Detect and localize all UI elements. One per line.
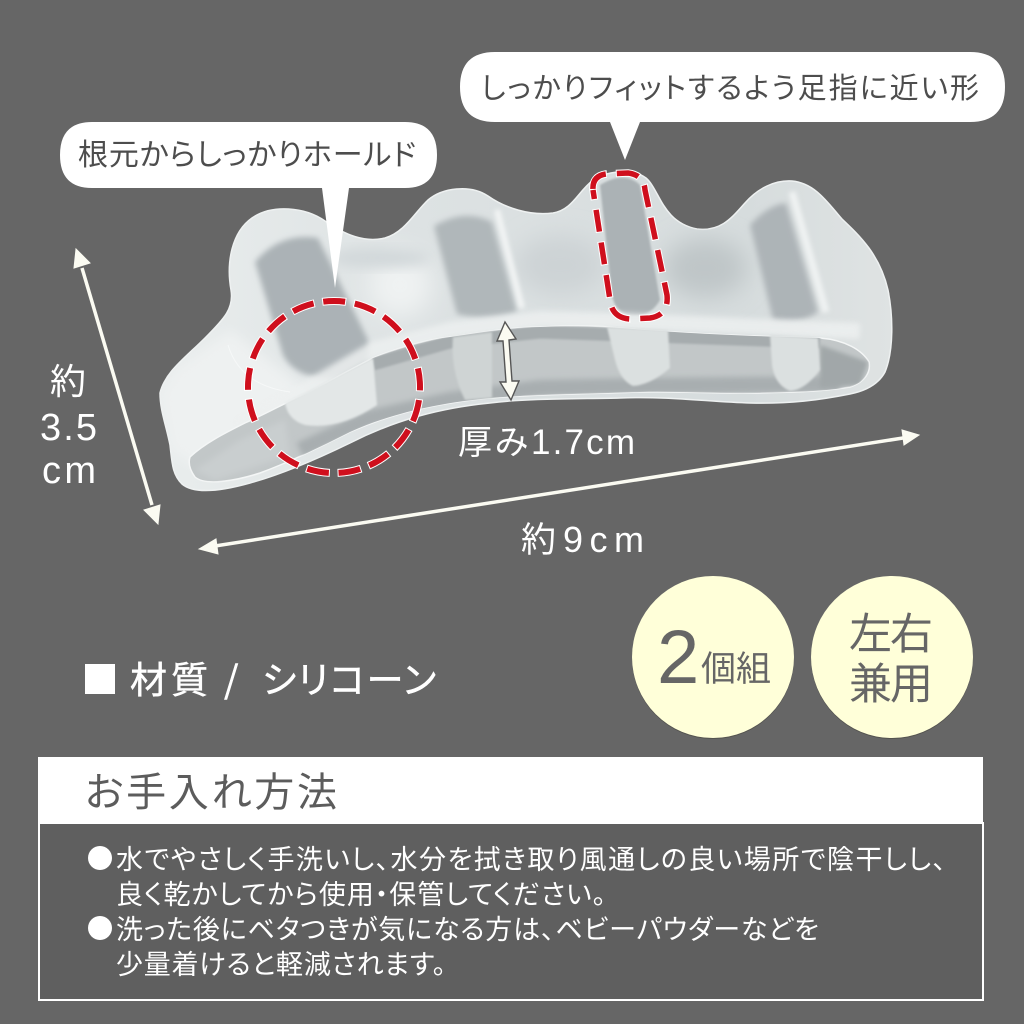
product photo: silicone toe separator <box>160 172 892 490</box>
finger slot 1 <box>255 237 369 378</box>
material label: / <box>224 650 239 704</box>
support tab 4 <box>770 335 820 391</box>
care panel header <box>38 757 983 823</box>
label: height <box>40 353 97 492</box>
callout: root hold: 根元からしっかりホールド <box>78 130 416 174</box>
material label <box>85 650 436 704</box>
care text: 良く乾かしてから使用・保管してください。 <box>116 873 606 912</box>
care text: 洗った後にベタつきが気になる方は、ベビーパウダーなどを <box>116 908 819 947</box>
inner opening of the band <box>189 326 869 482</box>
care text <box>88 838 946 982</box>
label: width: 9cm <box>563 519 644 560</box>
care text: 水でやさしく手洗いし、水分を拭き取り風通しの良い場所で陰干しし、 <box>116 838 946 877</box>
label: height: 約 <box>50 353 86 405</box>
arrow: height <box>74 249 160 524</box>
callout: fit shape: しっかりフィットするよう足指に近い形 <box>481 65 979 107</box>
label: width: 約 <box>521 512 556 563</box>
label: height: cm <box>42 450 96 492</box>
badge: 2 pieces: 個組 <box>701 641 771 692</box>
badge: left-right: 左右 <box>849 600 933 662</box>
finger slot 4 <box>750 203 818 321</box>
label: width <box>521 512 644 563</box>
label: height: 3.5 <box>40 407 97 449</box>
badge: 2 pieces: 2 <box>657 615 699 700</box>
material label: 材質 <box>130 650 208 704</box>
support tab 2 <box>452 332 492 400</box>
badge: left-right <box>811 576 973 739</box>
arrow: width <box>199 430 919 554</box>
dashed highlight: finger root circle <box>248 301 420 473</box>
finger slot 3 <box>600 178 660 315</box>
material label: シリコーン <box>262 650 436 704</box>
support tab 1 <box>285 358 377 426</box>
support tab 3 <box>607 327 670 386</box>
panel: care instructions <box>38 757 983 1000</box>
arrow: thickness <box>497 322 519 400</box>
label: thickness: 1.7cm <box>531 423 635 462</box>
callout: root hold <box>60 122 437 288</box>
care panel header: お手入れ方法 <box>85 760 337 818</box>
callout: fit shape <box>460 52 1005 160</box>
dashed highlight: finger slot outline <box>593 173 667 319</box>
badge: 2 pieces <box>632 576 794 739</box>
label: thickness <box>458 415 635 464</box>
badge: left-right: 兼用 <box>849 650 933 712</box>
care text: 少量着けると軽減されます。 <box>116 943 446 982</box>
finger slot 2 <box>434 216 517 318</box>
label: thickness: 厚み <box>458 415 528 464</box>
